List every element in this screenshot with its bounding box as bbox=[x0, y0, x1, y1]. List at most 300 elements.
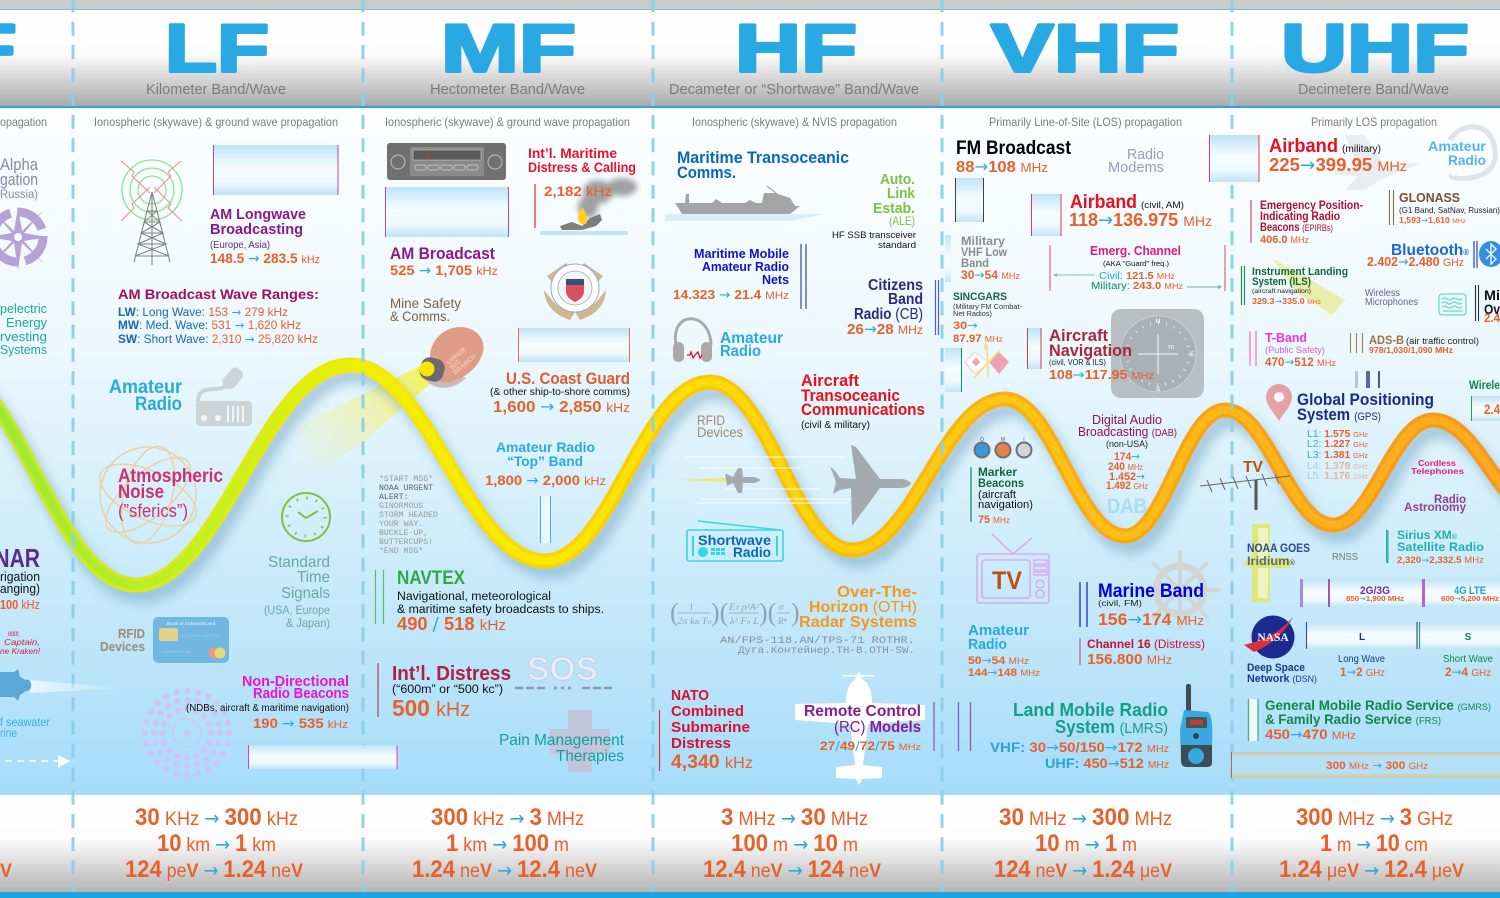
radar equation: ET ρ²A² bbox=[728, 602, 759, 612]
band title UHF: UHF bbox=[1281, 10, 1469, 86]
SOS with morse: SOS bbox=[527, 650, 598, 687]
band subtitle: Kilometer Band/Wave bbox=[146, 81, 286, 98]
Airband military: (military) bbox=[1342, 144, 1381, 155]
kraken note: Captain, bbox=[4, 637, 40, 647]
AM broadcast wave ranges bbox=[118, 286, 319, 346]
EPIRBs bbox=[1251, 200, 1363, 246]
Digital Audio Broadcasting: 174→ bbox=[1114, 450, 1140, 463]
Channel 16 bbox=[1080, 637, 1205, 668]
Marker Beacons: navigation) bbox=[978, 499, 1033, 511]
Military VHF Low Band: Band bbox=[961, 256, 989, 270]
Automatic Link Establishment: HF SSB transceiver bbox=[832, 230, 916, 240]
band: DSN: S bbox=[1465, 632, 1472, 643]
icon: mining helmet: UPPER bbox=[446, 347, 468, 367]
radar equation bbox=[670, 598, 800, 627]
SINCGARS: (Military FM Combat- bbox=[953, 302, 1022, 311]
footer ranges UHF bbox=[1279, 804, 1464, 883]
FM Broadcast: 88→108 MHz bbox=[956, 157, 1048, 176]
icon: mining helmet bbox=[418, 327, 484, 388]
band: military low bbox=[945, 235, 951, 282]
NAVTEX bbox=[376, 568, 604, 635]
Wireless Microphones bbox=[1365, 288, 1418, 308]
Digital Audio Broadcasting bbox=[1078, 412, 1177, 518]
Emergency channel: (AKA "Guard" freq.) bbox=[1103, 259, 1170, 268]
Channel 16: Channel 16 (Distress) bbox=[1087, 637, 1205, 651]
Instrument Landing System: 329.3 →335.0 MHz bbox=[1252, 297, 1321, 306]
Digital Audio Broadcasting: 1.492 GHz bbox=[1106, 480, 1148, 492]
Maritime Mobile Amateur Radio Nets: Nets bbox=[762, 272, 789, 287]
SONAR: anging) bbox=[0, 581, 40, 596]
RFID Devices: Devices bbox=[100, 639, 145, 654]
Long Wave: Long Wave bbox=[1338, 654, 1385, 665]
Amateur Radio VHF: 50→54 MHz bbox=[968, 654, 1030, 667]
Radio Astronomy bbox=[1404, 492, 1466, 514]
SONAR bbox=[0, 543, 40, 612]
band: navigation bbox=[1027, 328, 1041, 369]
Pain Management Therapies: Therapies bbox=[556, 748, 624, 765]
Short Wave: Short Wave bbox=[1443, 654, 1493, 665]
Long Wave bbox=[1338, 654, 1385, 679]
Amateur Radio Top Band bbox=[485, 439, 606, 489]
U.S. Coast Guard: U.S. Coast Guard bbox=[506, 369, 630, 388]
icon: NASA logo: NASA bbox=[1257, 632, 1289, 644]
NOAA message: BUTTERCUPS! bbox=[379, 538, 433, 547]
arrow: dashed white bbox=[5, 755, 70, 768]
footer ranges HF: 3 MHz → 30 MHz bbox=[721, 804, 868, 831]
icon: atmospheric noise globe bbox=[91, 440, 205, 550]
Maritime Mobile Amateur Radio Nets bbox=[673, 244, 806, 309]
Aircraft Transoceanic Communications: (civil & military) bbox=[801, 420, 870, 431]
FM Broadcast: FM Broadcast bbox=[956, 138, 1072, 159]
icon: beacon dots bbox=[145, 691, 229, 775]
Int'l Maritime Distress: Int’l. Maritime bbox=[528, 145, 617, 161]
icon: marker beacon lights: M bbox=[1001, 437, 1005, 443]
icon: marker beacon lights: I bbox=[1023, 437, 1025, 443]
Mine Safety bbox=[390, 296, 461, 324]
footer ranges LF bbox=[125, 804, 303, 883]
Sirius XM bbox=[1386, 528, 1485, 566]
icon: RC plane bbox=[795, 671, 925, 785]
SINCGARS: Net Radios) bbox=[953, 309, 992, 318]
panel: ELF fragment bbox=[0, 10, 125, 882]
Aircraft Navigation: Navigation bbox=[1049, 341, 1132, 360]
Marine Band bbox=[1080, 581, 1204, 630]
Remote Control RC Models bbox=[804, 702, 934, 753]
GLONASS: GLONASS bbox=[1399, 190, 1460, 205]
RNSS: RNSS bbox=[1332, 552, 1358, 563]
Emergency channel: Military: 243.0 MHz bbox=[1091, 281, 1183, 292]
Amateur Radio: Amateur bbox=[109, 377, 183, 398]
radar equation: )( bbox=[711, 598, 728, 627]
T-Band bbox=[1250, 330, 1336, 369]
Channel 16: 156.800 MHz bbox=[1087, 651, 1172, 668]
icon: medical cross bbox=[550, 710, 610, 772]
Alpha navigation: Alpha bbox=[0, 155, 38, 174]
SINCGARS: 30→ bbox=[953, 319, 978, 332]
Marker Beacons: 75 MHz bbox=[978, 514, 1010, 526]
propagation note: opagation bbox=[0, 115, 47, 129]
Automatic Link Establishment bbox=[832, 171, 916, 250]
Instrument Landing System bbox=[1242, 266, 1348, 306]
Instrument Landing System: Instrument Landing bbox=[1252, 266, 1348, 278]
band: SINCGARS bbox=[945, 348, 962, 392]
2G/3G: 2G/3G bbox=[1360, 585, 1390, 597]
NAVTEX: Navigational, meteorological bbox=[397, 591, 551, 603]
Alpha navigation: gation bbox=[0, 170, 38, 189]
Standard Time Signals: Time bbox=[297, 569, 330, 586]
NOAA message: YOUR WAY. bbox=[379, 520, 423, 529]
Radio Astronomy: Radio bbox=[1434, 492, 1466, 506]
4G LTE: 600→5,200 MHz bbox=[1441, 594, 1499, 603]
Wireless Microphones: Microphones bbox=[1365, 297, 1418, 308]
Alpha navigation: Russia) bbox=[0, 187, 38, 201]
Maritime Mobile Amateur Radio Nets: 14.323 → 21.4 MHz bbox=[673, 287, 789, 303]
2G/3G: 850→1,900 MHz bbox=[1346, 594, 1404, 603]
Aircraft Navigation bbox=[1049, 326, 1154, 383]
propagation note: Ionospheric (skywave) & ground wave propagation bbox=[385, 115, 630, 129]
Marker Beacons: Marker bbox=[978, 465, 1017, 479]
Maritime Transoceanic Comms: Maritime Transoceanic bbox=[677, 148, 849, 167]
Digital Audio Broadcasting: DAB bbox=[1107, 495, 1147, 518]
SOS with morse bbox=[515, 650, 612, 688]
icon: RFID card: Bank of ColoradoLand bbox=[167, 621, 216, 626]
Maritime Mobile Amateur Radio Nets: Amateur Radio bbox=[702, 259, 789, 274]
footer ranges MF: 1 km → 100 m bbox=[446, 830, 569, 857]
icon: satellite bbox=[1243, 524, 1290, 602]
Aircraft Navigation: Aircraft bbox=[1049, 326, 1108, 345]
AM Broadcast bbox=[390, 244, 498, 279]
footer ranges VHF bbox=[994, 804, 1172, 883]
U.S. Coast Guard: (& other ship-to-shore comms) bbox=[490, 387, 630, 398]
Airband military: 225→399.95 MHz bbox=[1269, 155, 1407, 176]
T-Band: 470→512 MHz bbox=[1265, 355, 1336, 369]
Radio Modems bbox=[1108, 146, 1164, 176]
kraken note bbox=[0, 628, 41, 656]
T-Band: (Public Safety) bbox=[1265, 345, 1325, 356]
wave bbox=[0, 360, 1500, 595]
Airband civil: 118→136.975 MHz bbox=[1069, 210, 1212, 231]
Citizens Band Radio bbox=[847, 277, 938, 338]
icon: ship wheel bbox=[1140, 550, 1220, 630]
propagation note: Ionospheric (skywave) & ground wave propagation bbox=[94, 115, 338, 129]
Short Wave bbox=[1443, 654, 1493, 679]
Emergency channel: Civil: 121.5 MHz bbox=[1099, 271, 1175, 282]
icon: mining helmet: BRANCH bbox=[452, 353, 478, 377]
GLONASS bbox=[1390, 190, 1500, 226]
AM Broadcast: 525 → 1,705 kHz bbox=[390, 262, 498, 279]
footer ranges MF: 1.24 neV → 12.4 neV bbox=[412, 856, 597, 883]
Amateur Radio: Radio bbox=[135, 394, 182, 415]
NOAA message: NOAA URGENT bbox=[379, 484, 433, 493]
Global Positioning System: L3: 1.381 GHz bbox=[1307, 449, 1368, 461]
radar names: Дуга.Контейнер.TH-B.OTH-SW. bbox=[738, 645, 915, 657]
AM Longwave Broadcasting: Broadcasting bbox=[210, 221, 303, 238]
radar equation: ( bbox=[670, 598, 679, 627]
icon: VOR instrument: S bbox=[1156, 386, 1161, 393]
radar equation: λ² F n L bbox=[729, 616, 759, 626]
NOAA message: *START MSG* bbox=[379, 474, 433, 484]
Radio Modems: Radio bbox=[1127, 146, 1164, 163]
AM broadcast wave ranges: MW: Med. Wave: 531 → 1,620 kHz bbox=[118, 318, 301, 332]
Standard Time Signals: Signals bbox=[281, 585, 330, 602]
Sirius XM: Satellite Radio bbox=[1397, 540, 1484, 554]
Over-The-Horizon radar: Over-The- bbox=[837, 584, 917, 601]
Remote Control RC Models: 27/49/72/75 MHz bbox=[820, 739, 921, 753]
SINCGARS: 87.97 MHz bbox=[953, 333, 1003, 345]
footer ranges LF: 124 peV → 1.24 neV bbox=[125, 856, 303, 883]
band title LF: LF bbox=[165, 10, 269, 86]
Aircraft Transoceanic Communications: Aircraft bbox=[801, 371, 859, 390]
Atmospheric Noise: Atmospheric bbox=[118, 466, 223, 487]
footer ranges VHF: 10 m → 1 m bbox=[1035, 830, 1137, 857]
Digital Audio Broadcasting: 240 MHz bbox=[1108, 461, 1143, 473]
RFID Devices bbox=[697, 412, 743, 440]
NATO Combined Submarine Distress: Submarine bbox=[671, 719, 750, 736]
icon: VOR instrument bbox=[1111, 309, 1204, 398]
icon: VOR instrument: N bbox=[1156, 318, 1161, 325]
U.S. Coast Guard: 1,600 → 2,850 kHz bbox=[493, 397, 630, 416]
Over-The-Horizon radar bbox=[799, 584, 917, 631]
band: airband civil bbox=[1031, 194, 1061, 236]
icon: walkie-talkie bbox=[1180, 684, 1212, 767]
footer ranges MF: 300 kHz → 3 MHz bbox=[431, 804, 584, 831]
footer ranges LF: 30 KHz → 300 kHz bbox=[135, 804, 298, 831]
NATO Combined Submarine Distress bbox=[660, 687, 753, 773]
thermoelectric harvesting bbox=[0, 301, 47, 357]
icon: RFID card bbox=[153, 617, 229, 663]
GMRS and FRS bbox=[1248, 697, 1491, 743]
icon: marker beacon lights bbox=[974, 437, 1032, 458]
Land Mobile Radio System: UHF: 450→512 MHz bbox=[1045, 755, 1169, 772]
Sirius XM: 2,320→2,332.5 MHz bbox=[1397, 555, 1485, 566]
Aircraft Navigation: 108→117.95 MHz bbox=[1049, 367, 1154, 383]
header background bbox=[0, 0, 1500, 108]
band: top band bbox=[540, 496, 550, 543]
icon: coast guard seal bbox=[544, 263, 606, 320]
EPIRBs: Emergency Position- bbox=[1260, 200, 1363, 212]
ADS-B: (air traffic control) bbox=[1406, 336, 1479, 346]
Land Mobile Radio System: System (LMRS) bbox=[1055, 717, 1168, 737]
Amateur Radio UHF bbox=[1428, 138, 1487, 168]
SINCGARS: SINCGARS bbox=[953, 291, 1007, 303]
kraken note: oom, bbox=[8, 628, 20, 638]
kraken note: ne Kraken! bbox=[0, 646, 41, 656]
footer ranges MF bbox=[412, 804, 597, 883]
band: full UHF bbox=[1231, 752, 1500, 778]
icon: amateur radio set bbox=[196, 365, 252, 426]
Global Positioning System: L1: 1.575 GHz bbox=[1307, 428, 1368, 440]
icon: headset bbox=[1450, 127, 1495, 179]
radar names bbox=[720, 635, 915, 657]
Int'l Distress: Int’l. Distress bbox=[392, 663, 511, 685]
mine lamp beam bbox=[300, 364, 430, 485]
panel: LF bbox=[91, 10, 397, 883]
Non-Directional Radio Beacons: Radio Beacons bbox=[253, 685, 349, 702]
Global Positioning System: L5: 1.176 GHz bbox=[1307, 470, 1368, 482]
Deep Space Network bbox=[1247, 662, 1317, 685]
band: airband military bbox=[1209, 135, 1259, 182]
band subtitle: Decimetere Band/Wave bbox=[1298, 81, 1449, 98]
icon: tanker ship bbox=[665, 186, 825, 221]
Bluetooth: 2.402→2.480 GHz bbox=[1367, 254, 1464, 270]
Non-Directional Radio Beacons: 190 → 535 kHz bbox=[253, 715, 348, 732]
propagation note: Primarily Line-of-Site (LOS) propagation bbox=[989, 115, 1182, 129]
Amateur Radio VHF: 144→148 MHz bbox=[968, 666, 1041, 679]
Aircraft Transoceanic Communications: Communications bbox=[801, 400, 925, 419]
panel: UHF bbox=[1200, 10, 1500, 883]
Shortwave Radio bbox=[687, 521, 783, 561]
Microwave Ovens bbox=[1476, 285, 1500, 325]
GPS band lines bbox=[1355, 371, 1380, 388]
icon: marker beacon lights: O bbox=[980, 437, 984, 443]
AM broadcast wave ranges: LW: Long Wave: 153 → 279 kHz bbox=[118, 305, 288, 319]
icon: fighter jet bbox=[1335, 135, 1420, 190]
Amateur Radio Top Band: “Top” Band bbox=[507, 453, 583, 469]
footer ranges LF: 10 km → 1 km bbox=[157, 830, 276, 857]
Marine Band: 156→174 MHz bbox=[1098, 610, 1204, 630]
icon: TV antenna bbox=[1200, 474, 1290, 510]
band subtitle: Hectometer Band/Wave bbox=[430, 81, 585, 98]
GMRS and FRS: General Mobile Radio Service (GMRS) bbox=[1265, 697, 1491, 713]
Over-The-Horizon radar: Radar Systems bbox=[799, 614, 917, 631]
Amateur Radio bbox=[720, 330, 783, 360]
Int'l Maritime Distress: 2,182 kHz bbox=[544, 183, 612, 199]
Pain Management Therapies: Pain Management bbox=[499, 732, 625, 749]
NOAA message: BUCKLE-UP, bbox=[379, 529, 428, 538]
footer background bbox=[0, 795, 1500, 898]
NOAA message: ALERT: bbox=[379, 493, 408, 502]
NATO Combined Submarine Distress: Combined bbox=[671, 703, 744, 720]
Automatic Link Establishment: (ALE) bbox=[889, 214, 915, 228]
Land Mobile Radio System: VHF: 30→50/150→172 MHz bbox=[990, 739, 1169, 756]
RFID Devices: Devices bbox=[697, 424, 743, 440]
Bluetooth bbox=[1367, 241, 1477, 270]
RFID Devices: RFID bbox=[697, 412, 725, 428]
Airband civil bbox=[1069, 192, 1212, 231]
Amateur Radio bbox=[109, 377, 183, 415]
Bluetooth: Bluetooth® bbox=[1391, 242, 1469, 259]
Military VHF Low Band bbox=[961, 234, 1020, 282]
footer ranges VHF: 30 MHz → 300 MHz bbox=[999, 804, 1172, 831]
EPIRBs: Beacons (EPIRBs) bbox=[1260, 222, 1333, 234]
T-Band: T-Band bbox=[1265, 330, 1307, 345]
Non-Directional Radio Beacons bbox=[186, 673, 349, 732]
Airband military: Airband bbox=[1269, 136, 1338, 157]
icon: VOR instrument: E bbox=[1190, 351, 1195, 358]
NAVTEX: & maritime safety broadcasts to ships. bbox=[397, 604, 604, 616]
icon: GPS pin bbox=[1266, 384, 1292, 421]
band: NDB bbox=[248, 745, 397, 769]
footer ranges HF bbox=[703, 804, 881, 883]
icon: headphones bbox=[673, 319, 712, 362]
ADS-B bbox=[1350, 333, 1479, 355]
AM broadcast wave ranges: SW: Short Wave: 2,310 → 25,820 kHz bbox=[118, 332, 318, 346]
main background bbox=[0, 108, 1500, 795]
SONAR: 100 kHz bbox=[0, 597, 40, 612]
Emergency channel: Emerg. Channel bbox=[1090, 243, 1181, 258]
FM Broadcast bbox=[956, 138, 1072, 176]
icon: sinking ship bbox=[540, 178, 637, 235]
seawater note: f seawater bbox=[0, 715, 50, 729]
Non-Directional Radio Beacons: Non-Directional bbox=[242, 673, 349, 690]
Maritime Transoceanic Comms: Comms. bbox=[677, 163, 736, 182]
RFID Devices: RFID bbox=[118, 626, 145, 641]
Global Positioning System: Global Positioning bbox=[1297, 390, 1434, 409]
Amateur Radio Top Band: 1,800 → 2,000 kHz bbox=[485, 472, 606, 489]
Automatic Link Establishment: Link bbox=[887, 185, 916, 202]
Standard Time Signals: & Japan) bbox=[286, 616, 330, 630]
icon: NASA logo bbox=[1244, 616, 1294, 658]
icon: compass bbox=[0, 207, 48, 270]
footer ranges UHF: 300 MHz → 3 GHz bbox=[1296, 804, 1453, 831]
Shortwave Radio: Shortwave bbox=[698, 532, 771, 548]
icon: radio tower bbox=[121, 160, 182, 265]
icon: mining helmet: BIG bbox=[449, 359, 462, 372]
Sirius XM: Sirius XM® bbox=[1397, 528, 1458, 542]
icon: TV bbox=[977, 534, 1049, 603]
seawater note bbox=[0, 715, 50, 740]
Automatic Link Establishment: Auto. bbox=[880, 171, 915, 188]
NOAA GOES Iridium bbox=[1247, 541, 1310, 568]
AM Longwave Broadcasting bbox=[210, 206, 320, 267]
Maritime Mobile Amateur Radio Nets: Maritime Mobile bbox=[694, 246, 789, 261]
Global Positioning System: L4: 1.379 GHz bbox=[1307, 460, 1368, 472]
NAVTEX: 490 / 518 kHz bbox=[397, 614, 506, 635]
SINCGARS bbox=[953, 291, 1022, 345]
Deep Space Network: Network (DSN) bbox=[1247, 673, 1317, 685]
Global Positioning System bbox=[1297, 390, 1434, 482]
Amateur Radio: Radio bbox=[720, 343, 761, 360]
NOAA GOES Iridium: Iridium ® bbox=[1247, 554, 1296, 568]
band title VHF: VHF bbox=[991, 10, 1179, 86]
panel: MF bbox=[376, 10, 637, 883]
Cordless Telephones: Telephones bbox=[1411, 467, 1465, 476]
icon: TV: TV bbox=[992, 567, 1022, 595]
Cordless Telephones bbox=[1411, 459, 1465, 476]
icon: submarine bbox=[0, 669, 125, 701]
Int'l Maritime Distress bbox=[528, 145, 636, 228]
2G/3G bbox=[1346, 585, 1404, 603]
Remote Control RC Models: (RC) Models bbox=[834, 719, 921, 736]
band: full UHF: 300 MHz → 300 GHz bbox=[1326, 759, 1429, 772]
Airband civil: (civil, AM) bbox=[1141, 200, 1184, 211]
NATO Combined Submarine Distress: 4,340 kHz bbox=[671, 752, 753, 773]
thermoelectric harvesting: pelectric bbox=[0, 301, 47, 316]
footer ranges VHF: 124 neV → 1.24 μeV bbox=[994, 856, 1172, 883]
ADS-B: ADS-B bbox=[1369, 335, 1404, 347]
Mine Safety: & Comms. bbox=[390, 309, 450, 324]
icon: ILS beam bbox=[1272, 258, 1345, 315]
panel: VHF bbox=[945, 10, 1259, 883]
icon: car radio bbox=[387, 143, 506, 180]
radar equation: )( bbox=[759, 598, 776, 627]
band: DSN: L bbox=[1359, 632, 1365, 643]
Cordless Telephones: Cordless bbox=[1418, 459, 1457, 468]
NATO Combined Submarine Distress: Distress bbox=[671, 735, 731, 752]
Mine Safety: Mine Safety bbox=[390, 296, 461, 311]
Amateur Radio Top Band: Amateur Radio bbox=[496, 439, 595, 455]
Alpha navigation bbox=[0, 155, 38, 201]
icon: RFID card: CHARLES HECK bbox=[159, 649, 190, 654]
U.S. Coast Guard bbox=[490, 369, 630, 416]
radar equation: R⁴ bbox=[777, 616, 787, 626]
footer ranges UHF: 1.24 μeV → 12.4 μeV bbox=[1279, 856, 1464, 883]
Marine Band: Marine Band bbox=[1098, 581, 1204, 602]
Atmospheric Noise: Noise bbox=[118, 482, 164, 503]
band: AM broadcast bbox=[385, 187, 509, 237]
footer fragment: V bbox=[0, 860, 12, 882]
AM Longwave Broadcasting: AM Longwave bbox=[210, 206, 306, 223]
